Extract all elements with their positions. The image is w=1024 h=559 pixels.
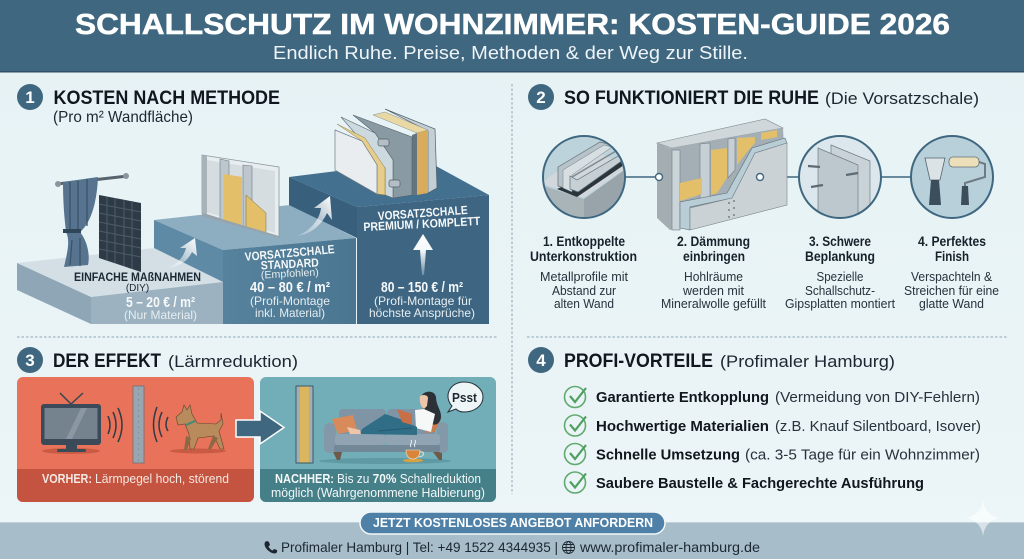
section 4 badge: 4 bbox=[536, 351, 546, 370]
illustration: wall cross-section bbox=[656, 119, 787, 230]
step text 4: Streichen für eine bbox=[904, 284, 999, 298]
title: SCHALLSCHUTZ IM WOHNZIMMER: KOSTEN-GUIDE 2026 bbox=[75, 9, 950, 41]
label: Vorsatzschale Standard: (Empfohlen) bbox=[261, 266, 319, 282]
step text 4: Verspachteln & bbox=[911, 270, 993, 284]
label: einfache Massnahmen: EINFACHE MAßNAHMEN bbox=[74, 272, 201, 284]
step text 4: 4. Perfektes bbox=[918, 234, 986, 249]
list item 1: (Vermeidung von DIY-Fehlern) bbox=[775, 390, 980, 406]
list item 2: (z.B. Knauf Silentboard, Isover) bbox=[775, 419, 981, 435]
speech bubble bbox=[448, 382, 483, 412]
step text 2: werden mit bbox=[682, 284, 745, 298]
speech bubble: Psst bbox=[452, 391, 478, 405]
label: Vorsatzschale Standard: STANDARD bbox=[260, 255, 319, 273]
section 1 heading: KOSTEN NACH METHODE bbox=[54, 88, 280, 109]
footer bar bbox=[0, 512, 1024, 559]
step 2: standard bbox=[154, 205, 356, 324]
step text 2: Hohlräume bbox=[684, 270, 743, 284]
icon: up arrow premium bbox=[413, 234, 433, 275]
step text 4: Finish bbox=[935, 249, 969, 264]
step text 2: 2. Dämmung bbox=[677, 234, 750, 249]
icon: standard wall frame bbox=[202, 155, 279, 238]
icon: sound waves left bbox=[108, 408, 122, 442]
label: Vorsatzschale Premium: (Profi-Montage für bbox=[374, 294, 472, 308]
list item 3: (ca. 3-5 Tage für ein Wohnzimmer) bbox=[745, 448, 980, 464]
section 1 subheading: (Pro m² Wandfläche) bbox=[53, 109, 193, 126]
icon: woman reading bbox=[347, 392, 441, 435]
website: www.profimaler-hamburg.de bbox=[579, 539, 760, 555]
section 3 heading: DER EFFEKT bbox=[53, 351, 161, 372]
icon: sound waves right bbox=[154, 407, 168, 442]
section 2 heading note: (Die Vorsatzschale) bbox=[825, 89, 979, 108]
step 1: simple measures bbox=[17, 248, 223, 324]
icon: before to after arrow bbox=[236, 411, 284, 444]
section 3 heading note: (Lärmreduktion) bbox=[168, 352, 298, 371]
section 4 heading note: (Profimaler Hamburg) bbox=[720, 352, 895, 371]
list item 3 bbox=[564, 444, 980, 464]
panel: Der Effekt bbox=[17, 347, 496, 502]
call to action button: JETZT KOSTENLOSES ANGEBOT ANFORDERN bbox=[373, 516, 653, 530]
list item 4: Saubere Baustelle & Fachgerechte Ausführung bbox=[596, 476, 924, 492]
icon: curved arrow step 2 to 3 bbox=[297, 196, 332, 236]
list item 3: Schnelle Umsetzung bbox=[596, 448, 740, 464]
section 2 heading: SO FUNKTIONIERT DIE RUHE bbox=[564, 88, 819, 109]
step text 1 bbox=[530, 234, 637, 311]
step text 3: Gipsplatten montiert bbox=[785, 297, 896, 311]
step text 3 bbox=[785, 234, 896, 311]
step text 1: Metallprofile mit bbox=[540, 270, 629, 284]
icon: barking dog bbox=[170, 405, 226, 454]
sparkle mark bbox=[966, 500, 1000, 536]
call to action button bbox=[360, 512, 665, 534]
icon: phone bbox=[264, 541, 277, 554]
after caption: NACHHER: bbox=[275, 471, 334, 486]
step text 2 bbox=[661, 234, 767, 311]
label: einfache Massnahmen: (DIY) bbox=[126, 283, 149, 294]
panel: Profi-Vorteile bbox=[528, 347, 981, 493]
step text 4: glatte Wand bbox=[919, 297, 984, 311]
step text 4 bbox=[904, 234, 999, 311]
label: Vorsatzschale Premium: VORSATZSCHALE bbox=[377, 203, 468, 223]
label: einfache Massnahmen bbox=[74, 272, 201, 322]
icon: acoustic foam panel bbox=[99, 195, 141, 272]
before panel bbox=[17, 377, 254, 502]
icon: sofa bbox=[324, 409, 448, 460]
label: Vorsatzschale Premium bbox=[363, 203, 481, 320]
header banner bbox=[0, 0, 1024, 72]
step text 3: Spezielle bbox=[816, 270, 864, 284]
section 4 heading: PROFI-VORTEILE bbox=[564, 351, 713, 372]
label: Vorsatzschale Standard bbox=[244, 242, 335, 320]
icon: television bbox=[41, 393, 101, 454]
step text 1: Abstand zur bbox=[552, 284, 616, 298]
list item 1: Garantierte Entkopplung bbox=[596, 390, 769, 406]
list item 1 bbox=[564, 386, 980, 408]
step text 2: Mineralwolle gefüllt bbox=[661, 297, 767, 311]
step text 3: 3. Schwere bbox=[809, 234, 871, 249]
icon: spatula and roller circle bbox=[911, 136, 993, 218]
section 2 badge: 2 bbox=[536, 88, 546, 107]
list item 2 bbox=[564, 415, 981, 436]
step text 2: einbringen bbox=[683, 249, 745, 264]
after panel bbox=[260, 377, 496, 502]
label: einfache Massnahmen: (Nur Material) bbox=[124, 308, 197, 322]
label: Vorsatzschale Standard: 40 – 80 € / m² bbox=[250, 280, 330, 296]
label: Vorsatzschale Premium: PREMIUM / KOMPLETT bbox=[363, 214, 481, 234]
after caption detail line 2: möglich (Wahrgenommene Halbierung) bbox=[271, 485, 485, 500]
section 3 badge: 3 bbox=[25, 351, 35, 370]
panel: So funktioniert die Ruhe bbox=[528, 84, 999, 311]
section 1 badge: 1 bbox=[25, 88, 35, 107]
icon: premium wall layers bbox=[335, 109, 437, 198]
label: Vorsatzschale Standard: inkl. Material) bbox=[255, 306, 325, 320]
subtitle: Endlich Ruhe. Preise, Methoden & der Weg zur Stille. bbox=[273, 43, 748, 63]
panel: Kosten nach Methode bbox=[17, 84, 489, 324]
icon: heavy boards circle bbox=[799, 136, 881, 225]
before caption: VORHER: bbox=[42, 471, 92, 486]
icon: globe bbox=[562, 542, 574, 554]
step text 1: alten Wand bbox=[554, 297, 614, 311]
icon: curtain on rod bbox=[55, 173, 129, 267]
step text 3: Beplankung bbox=[805, 249, 875, 264]
step text 1: 1. Entkoppelte bbox=[543, 234, 625, 249]
icon: metal profile circle bbox=[542, 135, 626, 219]
after caption detail line 1: Bis zu 70% Schallreduktion bbox=[337, 471, 481, 486]
before caption detail: Lärmpegel hoch, störend bbox=[95, 471, 229, 486]
label: Vorsatzschale Standard: (Profi-Montage bbox=[250, 294, 330, 308]
label: einfache Massnahmen: 5 – 20 € / m² bbox=[126, 295, 195, 311]
section 3 badge bbox=[17, 347, 43, 373]
contact details: Profimaler Hamburg | Tel: +49 1522 4344935 | bbox=[281, 539, 558, 555]
label: Vorsatzschale Premium: 80 – 150 € / m² bbox=[381, 280, 463, 296]
icon: coffee cup bbox=[403, 440, 424, 462]
list item 2: Hochwertige Materialien bbox=[596, 419, 769, 435]
step text 1: Unterkonstruktion bbox=[530, 249, 637, 264]
section 4 badge bbox=[528, 347, 554, 373]
label: Vorsatzschale Standard: VORSATZSCHALE bbox=[244, 242, 335, 264]
list item 4 bbox=[564, 472, 924, 493]
section 1 badge bbox=[17, 84, 43, 110]
label: Vorsatzschale Premium: höchste Ansprüche) bbox=[369, 306, 475, 320]
icon: insulated wall bbox=[296, 386, 313, 463]
icon: wall bbox=[133, 386, 144, 463]
step 3: premium bbox=[289, 160, 489, 324]
section 2 badge bbox=[528, 84, 554, 110]
icon: curved arrow step 1 to 2 bbox=[168, 238, 197, 268]
step text 3: Schallschutz- bbox=[805, 284, 875, 298]
